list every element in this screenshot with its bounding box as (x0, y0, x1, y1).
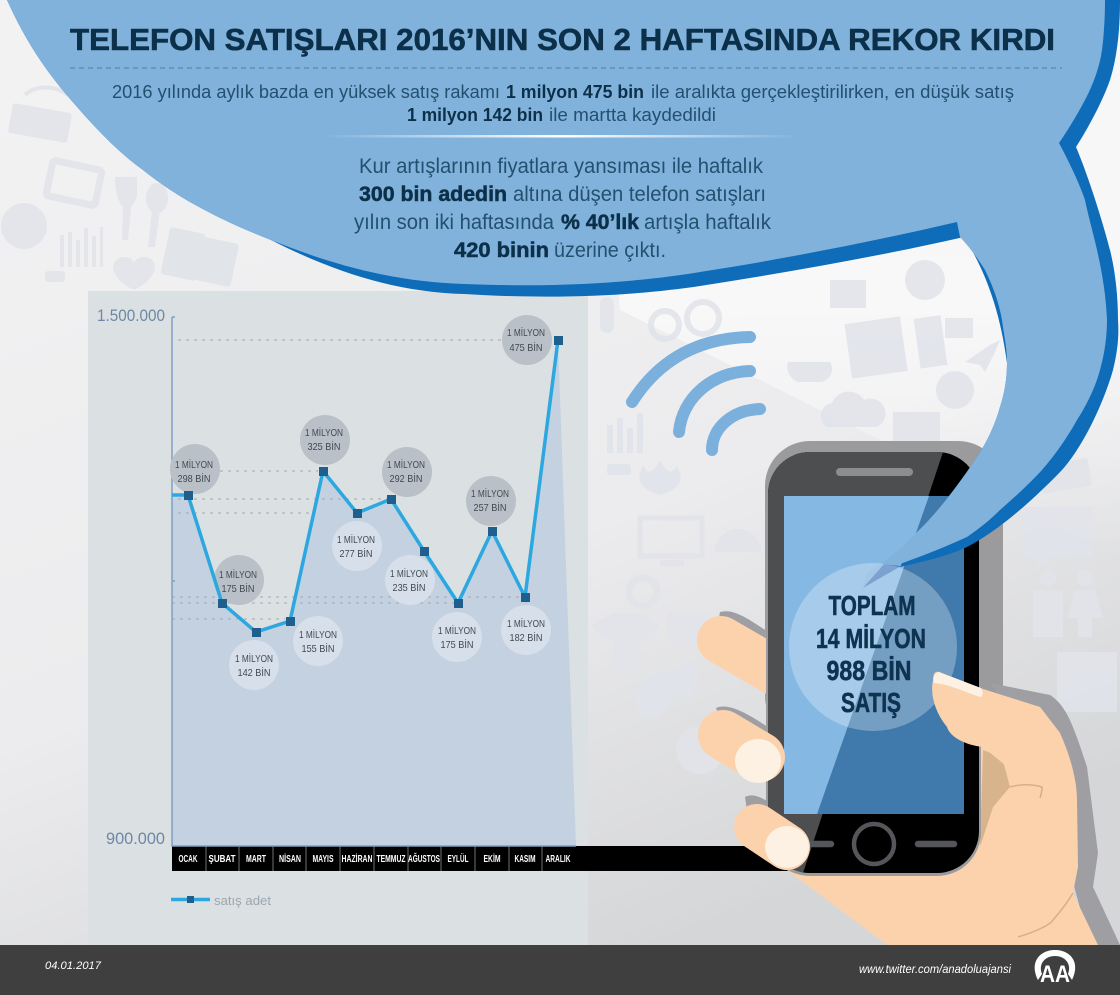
value bubbles: 175 BİN (222, 582, 254, 595)
y axis: 1.500.000 (97, 306, 165, 325)
phone body (766, 442, 981, 876)
thumb (932, 672, 1060, 765)
x axis month bar: TEMMUZ (376, 854, 406, 865)
soft keys (812, 841, 954, 847)
line chart (97, 306, 792, 871)
total sales callout (789, 563, 957, 731)
total sales callout: SATIŞ (841, 687, 901, 718)
data markers (184, 336, 563, 637)
value bubbles: 1 MİLYON (507, 326, 545, 339)
value bubbles: 235 BİN (392, 581, 426, 594)
y axis: 900.000 (106, 829, 165, 848)
icon: AA logo: AA (1040, 961, 1070, 988)
footer bar (0, 945, 1120, 995)
legend: satış adet (214, 893, 271, 908)
value bubbles: 1 MİLYON (390, 567, 428, 580)
value bubbles: 1 MİLYON (235, 652, 273, 665)
icon: AA logo (1035, 950, 1075, 988)
x axis month bar: EKİM (484, 852, 500, 865)
value bubbles: 1 MİLYON (337, 533, 375, 546)
title divider (70, 67, 1062, 69)
background icon pattern (1, 88, 1117, 774)
icon: wifi signal (632, 337, 760, 450)
phone screen (784, 496, 964, 814)
value bubbles: 298 BİN (178, 472, 210, 485)
phone (766, 442, 981, 876)
reference dashed lines (172, 340, 552, 619)
value bubbles: 257 BİN (474, 501, 506, 514)
finger three (735, 805, 810, 870)
body text: üzerine çıktı. (554, 239, 666, 262)
body text: % 40’lık (561, 211, 639, 234)
hand back: finger and palm (721, 640, 1098, 945)
x axis month bar (172, 846, 792, 871)
x axis month bar: ŞUBAT (208, 854, 236, 865)
value bubbles: 277 BİN (340, 547, 372, 560)
speaker (836, 468, 913, 476)
value bubbles: 1 MİLYON (175, 458, 213, 471)
body text: Kur artışlarının fiyatlara yansıması ile haftalık (359, 155, 763, 178)
total sales callout: 14 MİLYON (816, 623, 926, 654)
value bubbles: 182 BİN (510, 631, 542, 644)
value bubbles: 475 BİN (510, 341, 542, 354)
x axis month bar: HAZİRAN (342, 852, 372, 865)
subtitle text: ile martta kaydedildi (549, 105, 716, 125)
body text: altına düşen telefon satışları (513, 183, 766, 206)
x axis month bar: MART (246, 854, 266, 865)
x axis month bar: NİSAN (279, 852, 301, 865)
body text: 420 binin (454, 239, 549, 262)
finger two (723, 735, 781, 783)
body text (354, 155, 771, 262)
value bubbles: 142 BİN (238, 666, 270, 679)
total sales callout: TOPLAM (828, 590, 916, 621)
x axis month bar: ARALIK (546, 854, 571, 865)
value bubbles: 1 MİLYON (305, 426, 343, 439)
hand front: fingers and thumb (723, 672, 1060, 870)
value bubbles: 1 MİLYON (471, 487, 509, 500)
twitter url: www.twitter.com/anadoluajansi (859, 962, 1011, 976)
subtitle text: 2016 yılında aylık bazda en yüksek satış rakamı (112, 82, 500, 102)
value bubbles: 292 BİN (390, 472, 422, 485)
area under line (172, 340, 576, 846)
x axis month bar: KASIM (514, 854, 536, 865)
value bubbles: 325 BİN (308, 440, 340, 453)
x axis month bar: MAYIS (312, 854, 334, 865)
value bubbles: 1 MİLYON (507, 617, 545, 630)
body text: yılın son iki haftasında (354, 211, 554, 234)
value bubbles: 1 MİLYON (438, 624, 476, 637)
x axis month bar: AĞUSTOS (408, 852, 440, 865)
speech bubble (7, 0, 1120, 588)
chart panel (88, 291, 588, 945)
value bubbles: 1 MİLYON (219, 568, 257, 581)
value bubbles: 1 MİLYON (387, 458, 425, 471)
value bubbles: 1 MİLYON (299, 628, 337, 641)
legend (171, 893, 271, 908)
total sales callout: 988 BİN (826, 655, 912, 686)
body text: artışla haftalık (644, 211, 771, 234)
date: 04.01.2017 (45, 960, 102, 972)
y axis (97, 306, 576, 848)
value bubbles (170, 315, 552, 690)
value bubbles: 175 BİN (440, 638, 474, 651)
home button (854, 824, 894, 864)
phone casing and hand shadow (715, 441, 1120, 945)
value bubbles: 155 BİN (302, 642, 334, 655)
subtitle text (112, 82, 1014, 125)
subtitle text: 1 milyon 142 bin (407, 105, 543, 125)
data line (172, 340, 558, 632)
white separator (323, 135, 800, 138)
subtitle text: 1 milyon 475 bin (506, 82, 644, 102)
body text: 300 bin adedin (359, 183, 507, 206)
title: TELEFON SATIŞLARI 2016’NIN SON 2 HAFTASINDA REKOR KIRDI (70, 22, 1055, 57)
subtitle text: ile aralıkta gerçekleştirilirken, en düşük satış (651, 82, 1014, 102)
x axis month bar: EYLÜL (448, 852, 468, 865)
x axis month bar: OCAK (178, 854, 198, 865)
